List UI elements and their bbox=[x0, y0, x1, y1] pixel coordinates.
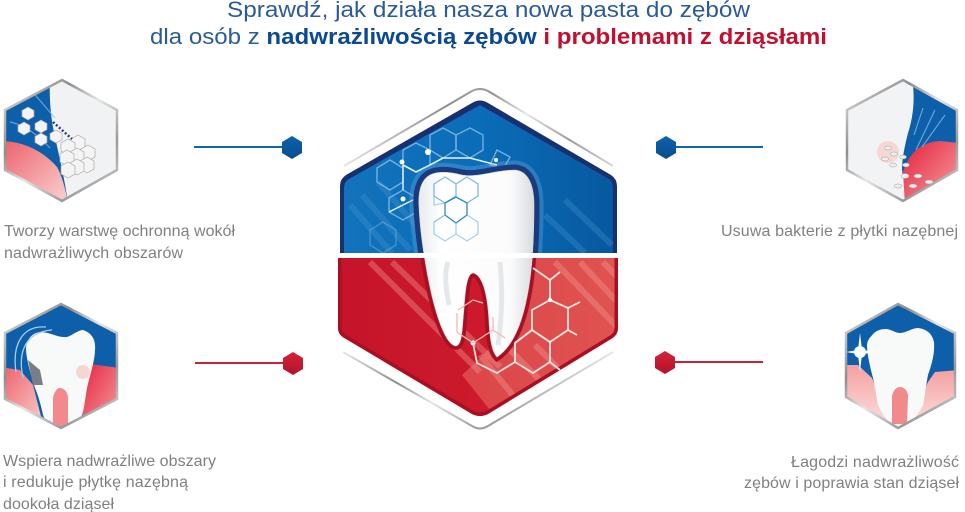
icon: sensitive areas tooth bbox=[4, 302, 118, 430]
connector: top right blue bbox=[656, 136, 763, 159]
tooth bbox=[419, 170, 534, 357]
red lower half bbox=[338, 258, 618, 416]
title: dla osób z nadwrażliwością zębów i problemami z dziąsłami bbox=[150, 24, 827, 49]
connector: top left blue bbox=[194, 136, 302, 159]
text: sensitive areas and plaque: Wspiera nadwrażliwe obszary bbox=[3, 453, 216, 470]
connector: bottom left red bbox=[195, 352, 303, 375]
icon: protective layer bbox=[4, 78, 118, 202]
red honeycomb over roots bbox=[457, 300, 505, 343]
silver frame bbox=[343, 89, 613, 428]
tooth shading bbox=[446, 262, 502, 345]
icon: soothed tooth bbox=[844, 302, 956, 430]
text: sensitive areas and plaque: i redukuje płytkę nazębną bbox=[3, 474, 188, 491]
text: protective layer bbox=[4, 223, 235, 262]
text: soothes sensitivity bbox=[744, 454, 959, 492]
central hexagon emblem bbox=[335, 89, 625, 428]
text: protective layer: nadwrażliwych obszarów bbox=[4, 245, 183, 262]
text: soothes sensitivity: zębów i poprawia stan dziąseł bbox=[744, 475, 959, 492]
text: protective layer: Tworzy warstwę ochronną wokół bbox=[4, 223, 235, 240]
text: sensitive areas and plaque bbox=[3, 453, 216, 512]
blue upper half bbox=[340, 100, 617, 253]
title bbox=[150, 0, 827, 49]
tooth honeycomb pattern bbox=[434, 177, 478, 241]
connector: bottom right red bbox=[655, 351, 763, 374]
text: removes plaque bacteria: Usuwa bakterie z płytki nazębnej bbox=[721, 223, 958, 240]
icon: plaque removal bbox=[846, 78, 958, 202]
white divider band bbox=[336, 253, 620, 258]
text: soothes sensitivity: Łagodzi nadwrażliwość bbox=[791, 454, 959, 471]
